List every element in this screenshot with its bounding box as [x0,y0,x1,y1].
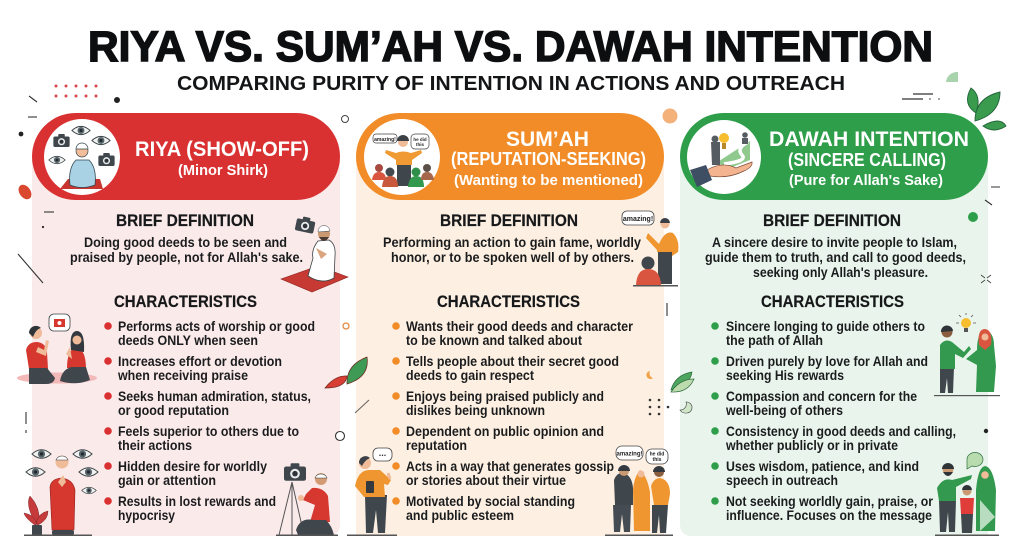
heading: characteristics: CHARACTERISTICS [114,293,257,311]
header pill [680,113,988,200]
header text: RIYA (SHOW-OFF) [135,138,309,161]
header pill [32,113,340,200]
panel background [32,155,340,536]
icon: three people gossiping: he did [650,452,664,458]
list: riya characteristics [104,319,315,523]
list: sum'ah characteristics: Motivated by social standing [406,494,575,509]
heading: characteristics: CHARACTERISTICS [761,293,904,311]
list: dawah characteristics: seeking His rewards [726,368,844,383]
icon: three people gossiping: this [653,457,662,463]
header text: (REPUTATION-SEEKING) [451,149,646,169]
list: riya characteristics: Hidden desire for worldly [118,459,267,474]
header text [451,128,646,189]
leaves: top right [967,88,1006,130]
panel: sum'ah [347,113,678,536]
decorative accents [16,72,1000,440]
header text [769,128,969,189]
list: riya characteristics: Seeks human admiration, status, [118,389,311,404]
title: RIYA VS. SUM’AH VS. DAWAH INTENTION [88,23,933,71]
header text [135,138,309,179]
list: riya characteristics: Increases effort or devotion [118,354,282,369]
icon: man praying on mat with camera [281,215,348,292]
icon: three people gossiping [605,446,673,536]
definition text: seeking only Allah's pleasure. [753,265,928,280]
heading: brief definition: BRIEF DEFINITION [440,212,578,230]
header text: (Minor Shirk) [178,162,268,179]
list: riya characteristics: hypocrisy [118,508,175,523]
list: sum'ah characteristics: Wants their good deeds and character [406,319,634,334]
subtitle: COMPARING PURITY OF INTENTION IN ACTIONS AND OUTREACH [177,73,845,95]
list: dawah characteristics: Consistency in good deeds and calling, [726,424,956,439]
header text: (SINCERE CALLING) [788,150,946,170]
panel background [356,155,664,536]
list: sum'ah characteristics: to be known and talked about [406,333,582,348]
list: dawah characteristics: Sincere longing to guide others to [726,319,925,334]
definition text: Doing good deeds to be seen and [84,235,287,250]
header text: (Wanting to be mentioned) [454,172,643,189]
header pill [356,113,664,200]
panel: riya [17,113,348,536]
header icon: speaker and audience [364,119,440,195]
icon: man in robe surrounded by eyes [24,450,98,536]
list: sum'ah characteristics: deeds to gain respect [406,368,534,383]
list: dawah characteristics [711,319,956,523]
list: sum'ah characteristics: Dependent on public opinion and [406,424,604,439]
leaves: between panels one and two [325,357,367,388]
header icon: hand holding path and light [687,120,761,194]
definition text: praised by people, not for Allah's sake. [70,250,303,265]
icon: man with tablet and speech bubble [347,448,397,536]
definition text: honor, or to be spoken well of by others. [391,250,634,265]
icon: man kneeling before camera on tripod [276,463,338,536]
panel: dawah intention [680,113,1000,536]
heading: brief definition: BRIEF DEFINITION [763,212,901,230]
icon: couple kneeling with camera bubble [17,314,97,384]
icon: man and woman shaking hands under lightbulb [934,313,1000,396]
list: riya characteristics: deeds ONLY when seen [118,333,258,348]
list: riya characteristics: Performs acts of worship or good [118,319,315,334]
list: riya characteristics: when receiving praise [117,368,248,383]
list: sum'ah characteristics: Acts in a way that generates gossip [406,459,614,474]
header icon: watched worshipper [44,119,120,195]
icon: man with tablet and speech bubble: ... [379,448,386,458]
header text: (Pure for Allah's Sake) [789,172,943,189]
definition text: A sincere desire to invite people to Islam, [712,235,957,250]
list: dawah characteristics: the path of Allah [726,333,823,348]
header text: SUM’AH [506,128,589,151]
header icon: speaker and audience: this [416,142,424,147]
icon: three people gossiping: amazing! [616,452,643,458]
list: dawah characteristics: well-being of others [725,403,843,418]
list: dawah characteristics: Not seeking worldly gain, praise, or [726,494,934,509]
list: dawah characteristics: whether publicly or in private [725,438,898,453]
list: riya characteristics: Results in lost rewards and [118,494,276,509]
definition text [705,235,966,280]
list: sum'ah characteristics: Enjoys being praised publicly and [406,389,604,404]
list: sum'ah characteristics: and public esteem [406,508,514,523]
header icon: speaker and audience: amazing! [374,137,396,143]
list: sum'ah characteristics: reputation [406,438,467,453]
list: sum'ah characteristics: dislikes being unknown [406,403,545,418]
icon: speaker with amazing bubble and listener [622,211,678,286]
heading: characteristics: CHARACTERISTICS [437,293,580,311]
list: sum'ah characteristics: or stories about their virtue [406,473,566,488]
leaves: between panels two and three [671,372,694,392]
list: dawah characteristics: Driven purely by love for Allah and [726,354,928,369]
list: riya characteristics: or good reputation [118,403,229,418]
definition text: Performing an action to gain fame, worldly [383,235,641,250]
definition text [383,235,641,265]
list: dawah characteristics: influence. Focuses on the message [726,508,932,523]
header icon: speaker and audience: he did [413,137,427,142]
list: dawah characteristics: Uses wisdom, patience, and kind [726,459,919,474]
list: dawah characteristics: speech in outreach [726,473,838,488]
list: riya characteristics: gain or attention [118,473,216,488]
list: riya characteristics: Feels superior to others due to [118,424,299,439]
icon: speaker with amazing bubble and listener: amazing! [623,216,653,223]
panel background [680,155,988,536]
heading: brief definition: BRIEF DEFINITION [116,212,254,230]
definition text [70,235,303,265]
header text: DAWAH INTENTION [769,128,969,151]
list: riya characteristics: their actions [118,438,192,453]
definition text: guide them to truth, and call to good deeds, [705,250,966,265]
icon: family with speech bubble [935,453,999,536]
list: dawah characteristics: Compassion and concern for the [726,389,917,404]
list: sum'ah characteristics: Tells people about their secret good [406,354,619,369]
list: sum'ah characteristics [392,319,634,523]
